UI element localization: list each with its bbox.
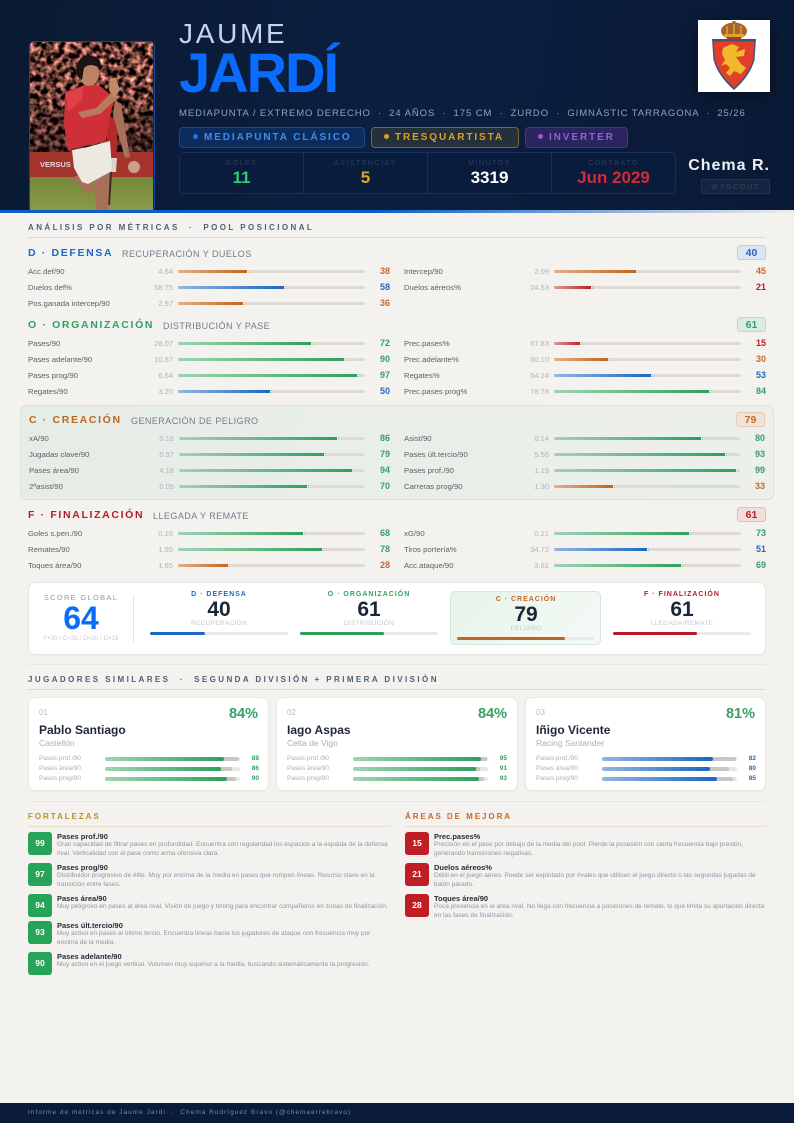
weakness: Duelos aéreos%: 21 (412, 869, 422, 879)
strength: Pases prof./90: Gran capacidad de filtrar pases en profundidad. Encuentra con regularidad los espacios a la espalda de la defensa rival. Verticalidad con el pase como arma ofensiva clara. (57, 841, 388, 856)
metric: Acc.ataque/90: Acc.ataque/90 (404, 561, 454, 570)
metric: Pases área/90: Pases área/90 (29, 466, 79, 475)
panel: fortalezas (28, 811, 390, 976)
weakness: Toques área/90: Toques área/90 (434, 894, 488, 903)
heading: organización: O · ORGANIZACIÓN (28, 319, 154, 331)
stat: minutos: MINUTOS (468, 160, 511, 167)
heading: fortalezas: FORTALEZAS (28, 812, 101, 821)
metric: Pases/90: 28.07 (154, 339, 173, 348)
metric: Prec.pases%: Prec.pases% (404, 339, 450, 348)
metric: Asist/90 (404, 433, 765, 443)
metric: Pos.ganada intercep/90: 36 (380, 298, 390, 308)
role tag: mediapunta clásico (179, 127, 365, 148)
panel: finalización (28, 507, 766, 570)
metric: Duelos aéreos%: Duelos aéreos% (404, 283, 461, 292)
mini bar: Pases prog/90: 90 (252, 775, 259, 782)
heading: creación: C · CREACIÓN (29, 414, 122, 426)
footer credit: Informe de métricas de Jaume Jardí · Chema Rodríguez Bravo (@chemaerrebravo) (28, 1109, 351, 1116)
metric: Pases prog/90: 97 (380, 370, 390, 380)
analyst name: Chema R. (688, 157, 770, 174)
mini bar: Pases prog/90: Pases prog/90 (287, 775, 329, 782)
metric: Pases prof./90: 99 (755, 465, 765, 475)
weakness: Prec.pases%: Prec.pases% (434, 832, 480, 841)
score: defensa (150, 591, 288, 635)
card: Iago Aspas: Iago Aspas (287, 723, 351, 737)
mini bar: Pases prof./90: Pases prof./90 (287, 755, 329, 762)
score: finalización (613, 589, 751, 635)
metric: Acc.ataque/90 (404, 560, 766, 570)
score: creación (highlighted): 79 (514, 603, 538, 626)
weakness: Prec.pases%: 15 (412, 838, 422, 848)
stat: contrato: CONTRATO (588, 160, 639, 167)
metric: xA/90: xA/90 (29, 434, 49, 443)
metric: Pases prog/90: Pases prog/90 (28, 371, 78, 380)
mini bar: Pases prof./90 (536, 754, 756, 764)
role tag: mediapunta clásico: MEDIAPUNTA CLÁSICO (204, 132, 352, 143)
mini bar: Pases prog/90: Pases prog/90 (39, 775, 81, 782)
role tag: tresquartista (371, 127, 519, 148)
metric: Pases adelante/90: 10.87 (154, 355, 173, 364)
icon: club crest (698, 20, 770, 92)
mini bar: Pases área/90: Pases área/90 (536, 765, 578, 772)
strength: Pases adelante/90 (28, 952, 390, 975)
card: Iago Aspas: 02 (287, 708, 296, 717)
metric: Prec.adelante%: Prec.adelante% (404, 355, 459, 364)
strength: Pases últ.tercio/90 (28, 921, 390, 948)
metric: Goles s.pen./90: 0.16 (158, 529, 173, 538)
metric: xA/90: 0.16 (159, 434, 174, 443)
metric: Jugadas clave/90: 0.57 (159, 450, 174, 459)
metric: Acc.def/90: 38 (380, 266, 390, 276)
metric: xG/90: xG/90 (404, 529, 425, 538)
stat: goles: 11 (232, 168, 250, 187)
metric: Prec.pases prog%: Prec.pases prog% (404, 387, 467, 396)
mini bar: Pases área/90: 91 (500, 765, 507, 772)
metric: Regates% (404, 370, 766, 380)
data source badge (701, 179, 770, 194)
header accent line (0, 210, 794, 213)
score badge: organización (737, 317, 766, 332)
card: Iñigo Vicente: Racing Santander (536, 738, 604, 748)
metric: Acc.def/90: 4.64 (158, 267, 173, 276)
metric: xG/90: 73 (756, 528, 766, 538)
score: finalización: LLEGADA/REMATE (651, 620, 713, 627)
metric: Prec.pases prog%: 78.78 (530, 387, 549, 396)
strength: Pases prof./90: 99 (35, 838, 45, 848)
mini bar: Pases área/90 (536, 764, 756, 774)
stat: asistencias: ASISTENCIAS (334, 160, 397, 167)
metric: Pases prof./90: 1.19 (534, 466, 549, 475)
metric: Jugadas clave/90: 79 (380, 449, 390, 459)
panel: finalización: LLEGADA Y REMATE (153, 511, 249, 521)
mini bar: Pases área/90: Pases área/90 (287, 765, 329, 772)
metric: Tiros portería%: 51 (756, 544, 766, 554)
strength: Pases adelante/90: Muy activo en el juego vertical. Volumen muy superior a la media, buscando sistemáticamente la progresión. (57, 961, 370, 968)
player photo (29, 41, 155, 210)
mini bar: Pases área/90: 80 (749, 765, 756, 772)
card: Iago Aspas: Celta de Vigo (287, 738, 338, 748)
mini bar: Pases área/90: Pases área/90 (39, 765, 81, 772)
metric: Duelos aéreos%: 21 (756, 282, 766, 292)
metric: Goles s.pen./90: 68 (380, 528, 390, 538)
metric: Regates/90: 3.20 (158, 387, 173, 396)
score: organización: DISTRIBUCIÓN (344, 620, 394, 627)
card: Iñigo Vicente: Iñigo Vicente (536, 723, 610, 737)
metric: Pases prof./90 (404, 465, 765, 475)
metric: Pos.ganada intercep/90: Pos.ganada intercep/90 (28, 299, 110, 308)
metric: Pases últ.tercio/90: 93 (755, 449, 765, 459)
card: Pablo Santiago: 84% (229, 706, 258, 722)
panel: organización (28, 317, 766, 396)
score: organización: 61 (357, 598, 381, 621)
panel: defensa (28, 245, 766, 308)
mini bar: Pases prog/90: 85 (749, 775, 756, 782)
metric: Prec.pases%: 67.83 (530, 339, 549, 348)
metric: Jugadas clave/90 (29, 449, 390, 459)
metric: Regates/90: Regates/90 (28, 387, 68, 396)
stat: minutos (428, 153, 552, 193)
metric: 2ªasist/90: 2ªasist/90 (29, 482, 63, 491)
strength: Pases prog/90: Distribuidor progresivo de élite. Muy por encima de la media en pases que rompen líneas. Recurso clave en la transición entre fases. (57, 872, 375, 888)
metric: Carreras prog/90: Carreras prog/90 (404, 482, 463, 491)
metric: xA/90 (29, 433, 390, 443)
metric: Acc.def/90 (28, 266, 390, 276)
metric: Toques área/90 (28, 560, 390, 570)
data source badge: WYSCOUT (711, 182, 760, 191)
strength: Pases prog/90: 97 (35, 869, 45, 879)
metric: Pos.ganada intercep/90 (28, 298, 390, 308)
metric: Carreras prog/90 (404, 481, 765, 491)
metric: Pases/90: 72 (380, 338, 390, 348)
card: Pablo Santiago (29, 698, 268, 790)
mini bar: Pases área/90 (287, 765, 507, 772)
metric: 2ªasist/90 (29, 481, 390, 491)
metric: Pases/90: Pases/90 (28, 339, 60, 348)
player photo: VERSUS (40, 160, 71, 169)
metric: Regates%: 54.24 (530, 371, 549, 380)
panel: organización: DISTRIBUCIÓN Y PASE (163, 321, 270, 331)
stats strip (179, 152, 676, 194)
metric: Remates/90: Remates/90 (28, 545, 70, 554)
heading: áreas de mejora: ÁREAS DE MEJORA (405, 812, 512, 821)
metric: Duelos def%: Duelos def% (28, 283, 72, 292)
panel: áreas de mejora (405, 811, 766, 921)
metric: Prec.adelante%: 60.10 (530, 355, 549, 364)
metric: Remates/90: 78 (380, 544, 390, 554)
score: finalización: 61 (670, 598, 694, 621)
metric: Asist/90: 80 (755, 433, 765, 443)
metric: Intercep/90: 2.09 (534, 267, 549, 276)
strength: Pases prof./90: Pases prof./90 (57, 832, 108, 841)
stat: asistencias (304, 153, 428, 193)
strength: Pases últ.tercio/90: 93 (35, 927, 45, 937)
metric: Goles s.pen./90 (28, 528, 390, 538)
stat: goles (180, 153, 304, 193)
weakness: Prec.pases% (405, 832, 766, 859)
card: Pablo Santiago: Castellón (39, 738, 74, 748)
metric: Tiros portería% (404, 544, 766, 554)
metric: Carreras prog/90: 1.30 (534, 482, 549, 491)
heading: defensa: D · DEFENSA (28, 247, 113, 259)
weakness: Duelos aéreos%: Duelos aéreos% (434, 863, 492, 872)
metric: Intercep/90: Intercep/90 (404, 267, 443, 276)
metric: Pases adelante/90: 90 (380, 354, 390, 364)
mini bar: Pases prog/90 (39, 775, 259, 782)
card: Iñigo Vicente (526, 698, 765, 790)
card: Pablo Santiago: 01 (39, 708, 48, 717)
metric: Prec.adelante% (404, 354, 766, 364)
metric: Acc.ataque/90: 69 (756, 560, 766, 570)
metric: Regates/90: 50 (380, 386, 390, 396)
stat: contrato: Jun 2029 (577, 168, 650, 187)
stat: minutos: 3319 (471, 168, 508, 187)
strength: Pases prog/90: Pases prog/90 (57, 863, 108, 872)
metric: Pases prog/90 (28, 370, 390, 380)
footer (0, 1103, 794, 1123)
metric: 2ªasist/90: 0.05 (159, 482, 174, 491)
score: creación (highlighted): C · CREACIÓN (496, 596, 556, 603)
score: defensa: 40 (207, 598, 231, 621)
mini bar: Pases prof./90: 88 (252, 755, 259, 762)
score: defensa: RECUPERACIÓN (191, 620, 247, 627)
score: creación (highlighted) (450, 591, 601, 645)
metric: Duelos def% (28, 282, 390, 292)
section heading: similar players: JUGADORES SIMILARES · SEGUNDA DIVISIÓN + PRIMERA DIVISIÓN (28, 675, 439, 684)
metric: Toques área/90: Toques área/90 (28, 561, 81, 570)
score badge: finalización (737, 507, 766, 522)
card: Iñigo Vicente: 03 (536, 708, 545, 717)
mini bar: Pases área/90: 86 (252, 765, 259, 772)
mini bar: Pases prog/90: 93 (500, 775, 507, 782)
metric: 2ªasist/90: 70 (380, 481, 390, 491)
role tag: inverter: INVERTER (549, 132, 615, 143)
mini bar: Pases prof./90: 82 (749, 755, 756, 762)
metric: Carreras prog/90: 33 (755, 481, 765, 491)
metric: Pases prog/90: 6.64 (158, 371, 173, 380)
strength: Pases área/90: Muy peligroso en pases al área rival. Visión de juego y timing para encontrar compañeros en zonas de finalización. (57, 903, 388, 910)
name: first name: JAUME (179, 18, 287, 49)
strength: Pases últ.tercio/90: Pases últ.tercio/90 (57, 921, 123, 930)
strength: Pases área/90: Pases área/90 (57, 894, 107, 903)
metric: Asist/90: Asist/90 (404, 434, 432, 443)
panel: creación (highlighted): GENERACIÓN DE PELIGRO (131, 416, 258, 426)
score badge: creación (736, 412, 765, 427)
role tag: tresquartista: TRESQUARTISTA (395, 132, 504, 143)
metric: Prec.adelante%: 30 (756, 354, 766, 364)
score: creación (highlighted): PELIGRO (510, 625, 542, 632)
mini bar: Pases prof./90 (287, 755, 507, 762)
metric: Prec.pases%: 15 (756, 338, 766, 348)
header banner (0, 0, 794, 210)
metric: Tiros portería%: Tiros portería% (404, 545, 457, 554)
metric: Prec.pases prog% (404, 386, 766, 396)
score badge: finalización: 61 (746, 509, 757, 521)
metric: Acc.def/90: Acc.def/90 (28, 267, 65, 276)
metric: Regates%: 53 (756, 370, 766, 380)
global score (43, 593, 119, 642)
metric: Tiros portería%: 34.72 (530, 545, 549, 554)
metric: Pos.ganada intercep/90: 2.97 (158, 299, 173, 308)
role tag: inverter (525, 127, 628, 148)
metric: Duelos def%: 58.75 (154, 283, 173, 292)
score badge: organización: 61 (746, 319, 757, 331)
score badge: defensa: 40 (746, 247, 757, 259)
metric: Pases adelante/90: Pases adelante/90 (28, 355, 92, 364)
metric: Pases área/90: 4.18 (159, 466, 174, 475)
metric: Jugadas clave/90: Jugadas clave/90 (29, 450, 89, 459)
strength: Pases adelante/90: 90 (35, 958, 45, 968)
weakness: Toques área/90 (405, 894, 766, 921)
metric: Pases área/90 (29, 465, 390, 475)
metric: Acc.ataque/90: 3.61 (534, 561, 549, 570)
metric: Remates/90 (28, 544, 390, 554)
score: organización (300, 589, 438, 635)
metric: Intercep/90: 45 (756, 266, 766, 276)
metric: Goles s.pen./90: Goles s.pen./90 (28, 529, 82, 538)
metric: Pases prof./90: Pases prof./90 (404, 466, 454, 475)
card: Pablo Santiago: Pablo Santiago (39, 723, 126, 737)
metric: xG/90 (404, 528, 766, 538)
mini bar: Pases prog/90: Pases prog/90 (536, 775, 578, 782)
strength: Pases prog/90 (28, 863, 390, 890)
strength: Pases área/90 (28, 894, 390, 917)
metric: Pases adelante/90 (28, 354, 390, 364)
metric: Pases/90 (28, 338, 390, 348)
mini bar: Pases prog/90 (287, 774, 507, 784)
metric: Pases últ.tercio/90: Pases últ.tercio/90 (404, 450, 468, 459)
card: Iago Aspas (277, 698, 517, 790)
name: surname: JARDÍ (179, 41, 337, 104)
score badge: defensa (737, 245, 766, 260)
metric: Regates/90 (28, 386, 390, 396)
metric: xG/90: 0.21 (534, 529, 549, 538)
weakness: Duelos aéreos%: Débil en el juego aéreo. Puede ser explotado por rivales que utilicen el juego directo o las segundas jugadas de balón parado. (434, 872, 756, 888)
global score: 64 (63, 600, 99, 636)
weakness: Toques área/90: Poca presencia en el área rival. No llega con frecuencia a posiciones de remate, lo que limita su aportación directa en las fases de finalización. (434, 903, 764, 918)
stat: asistencias: 5 (361, 168, 370, 187)
metric: xA/90: 86 (380, 433, 390, 443)
metric: Pases últ.tercio/90: 5.56 (534, 450, 549, 459)
weakness: Prec.pases%: Precisión en el pase por debajo de la media del pool. Pierde la posesión con cierta frecuencia bajo presión, generando transiciones negativas. (434, 841, 743, 856)
metric: Intercep/90 (404, 266, 766, 276)
metric: Remates/90: 1.95 (158, 545, 173, 554)
metric: Duelos aéreos% (404, 282, 766, 292)
metric: Prec.pases prog%: 84 (756, 386, 766, 396)
section heading: metrics: ANÁLISIS POR MÉTRICAS · POOL POSICIONAL (28, 223, 314, 232)
heading: finalización: F · FINALIZACIÓN (28, 509, 144, 521)
metric: Prec.pases% (404, 338, 766, 348)
panel: creación (highlighted) (20, 405, 774, 500)
panel: defensa: RECUPERACIÓN Y DUELOS (122, 249, 252, 259)
mini bar: Pases prof./90: Pases prof./90 (39, 755, 81, 762)
strength: Pases últ.tercio/90: Muy activo en pases al último tercio. Encuentra líneas hacia los jugadores de ataque con frecuencia muy por encima de la media. (57, 930, 370, 946)
card: Iñigo Vicente: 81% (726, 706, 755, 722)
score: organización: O · ORGANIZACIÓN (328, 591, 410, 598)
stat: goles: GOLES (226, 160, 257, 167)
metric: Regates%: Regates% (404, 371, 440, 380)
panel: score summary (29, 583, 765, 654)
weakness: Duelos aéreos% (405, 863, 766, 890)
player info line: MEDIAPUNTA / EXTREMO DERECHO · 24 AÑOS · 175 CM · ZURDO · GIMNÀSTIC TARRAGONA · 25/26 (179, 108, 746, 119)
metric: Asist/90: 0.14 (534, 434, 549, 443)
strength: Pases área/90: 94 (35, 900, 45, 910)
mini bar: Pases prof./90: Pases prof./90 (536, 755, 578, 762)
mini bar: Pases prof./90 (39, 755, 259, 762)
metric: Duelos aéreos%: 24.53 (530, 283, 549, 292)
score: finalización: F · FINALIZACIÓN (644, 591, 720, 598)
strength: Pases adelante/90: Pases adelante/90 (57, 952, 122, 961)
global score: F×30 / C×35 / O×20 / D×15 (43, 636, 119, 642)
metric: Duelos def%: 58 (380, 282, 390, 292)
metric: Toques área/90: 28 (380, 560, 390, 570)
score badge: creación: 79 (745, 414, 756, 426)
mini bar: Pases área/90 (39, 765, 259, 772)
card: Iago Aspas: 84% (478, 706, 507, 722)
strength: Pases prof./90 (28, 832, 390, 859)
score: defensa: D · DEFENSA (191, 591, 247, 598)
mini bar: Pases prof./90: 95 (500, 755, 507, 762)
weakness: Toques área/90: 28 (412, 900, 422, 910)
mini bar: Pases prog/90 (536, 774, 756, 784)
metric: Toques área/90: 1.65 (158, 561, 173, 570)
metric: Pases últ.tercio/90 (404, 449, 765, 459)
metric: Pases área/90: 94 (380, 465, 390, 475)
global score: SCORE GLOBAL (44, 593, 118, 602)
